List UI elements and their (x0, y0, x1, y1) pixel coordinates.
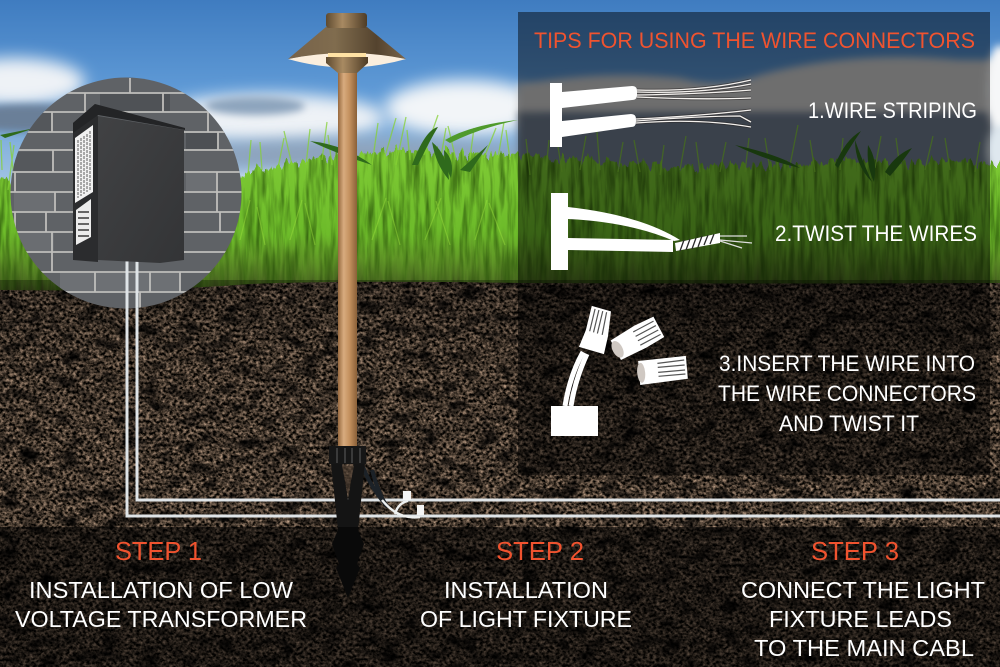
icon: stripped wires (550, 80, 751, 147)
brick wall (0, 76, 250, 310)
tip 3 label: THE WIRE CONNECTORS (718, 381, 976, 406)
step 3: STEP 3 (811, 536, 899, 566)
step 3: TO THE MAIN CABL (754, 635, 974, 661)
box front (98, 116, 184, 263)
step 3 (741, 536, 985, 661)
tip 3 label: 3.INSERT THE WIRE INTO (719, 351, 975, 376)
tip 3 label: AND TWIST IT (779, 411, 919, 436)
underground wires (127, 262, 1000, 516)
thin grass strands (1, 115, 980, 190)
two wires below box (127, 258, 137, 310)
side label upper (75, 125, 93, 203)
bottom steps band (0, 527, 1000, 667)
connector 1 (579, 306, 616, 354)
connector lead (382, 500, 420, 517)
tip 3 label (718, 351, 976, 436)
clouds behind panel (518, 57, 1000, 120)
step 2 (420, 536, 632, 632)
clouds (0, 45, 1000, 235)
landscape light (288, 13, 424, 598)
step 1: VOLTAGE TRANSFORMER (15, 606, 307, 632)
side label lower (76, 199, 91, 245)
panel title: TIPS FOR USING THE WIRE CONNECTORS (534, 28, 975, 53)
connector 2 (607, 316, 665, 362)
box top (73, 104, 185, 133)
step 3: FIXTURE LEADS (769, 606, 952, 632)
step 2: STEP 2 (496, 536, 584, 566)
spike leads (362, 465, 388, 507)
box side (73, 104, 98, 262)
soil (0, 275, 1000, 667)
step 1: STEP 1 (115, 536, 202, 566)
tips panel (518, 12, 990, 475)
sky background (0, 0, 1000, 300)
step 2: OF LIGHT FIXTURE (420, 606, 632, 632)
step 1 (15, 536, 307, 632)
transformer brick circle (0, 76, 250, 310)
icon: wire connectors (551, 306, 688, 436)
stake (329, 446, 366, 598)
step 3: CONNECT THE LIGHT (741, 577, 985, 603)
connector 3 (636, 356, 688, 385)
connector caps (403, 491, 424, 515)
icon: twisted wires (551, 193, 752, 270)
step 1: INSTALLATION OF LOW (29, 577, 293, 603)
grass (0, 115, 1000, 300)
post (338, 70, 357, 448)
lamp shade (288, 13, 406, 73)
tip 1 label: 1.WIRE STRIPING (808, 98, 977, 123)
transformer box (73, 104, 185, 263)
step 2: INSTALLATION (444, 577, 608, 603)
grass blades (0, 120, 912, 182)
tip 2 label: 2.TWIST THE WIRES (775, 221, 977, 246)
